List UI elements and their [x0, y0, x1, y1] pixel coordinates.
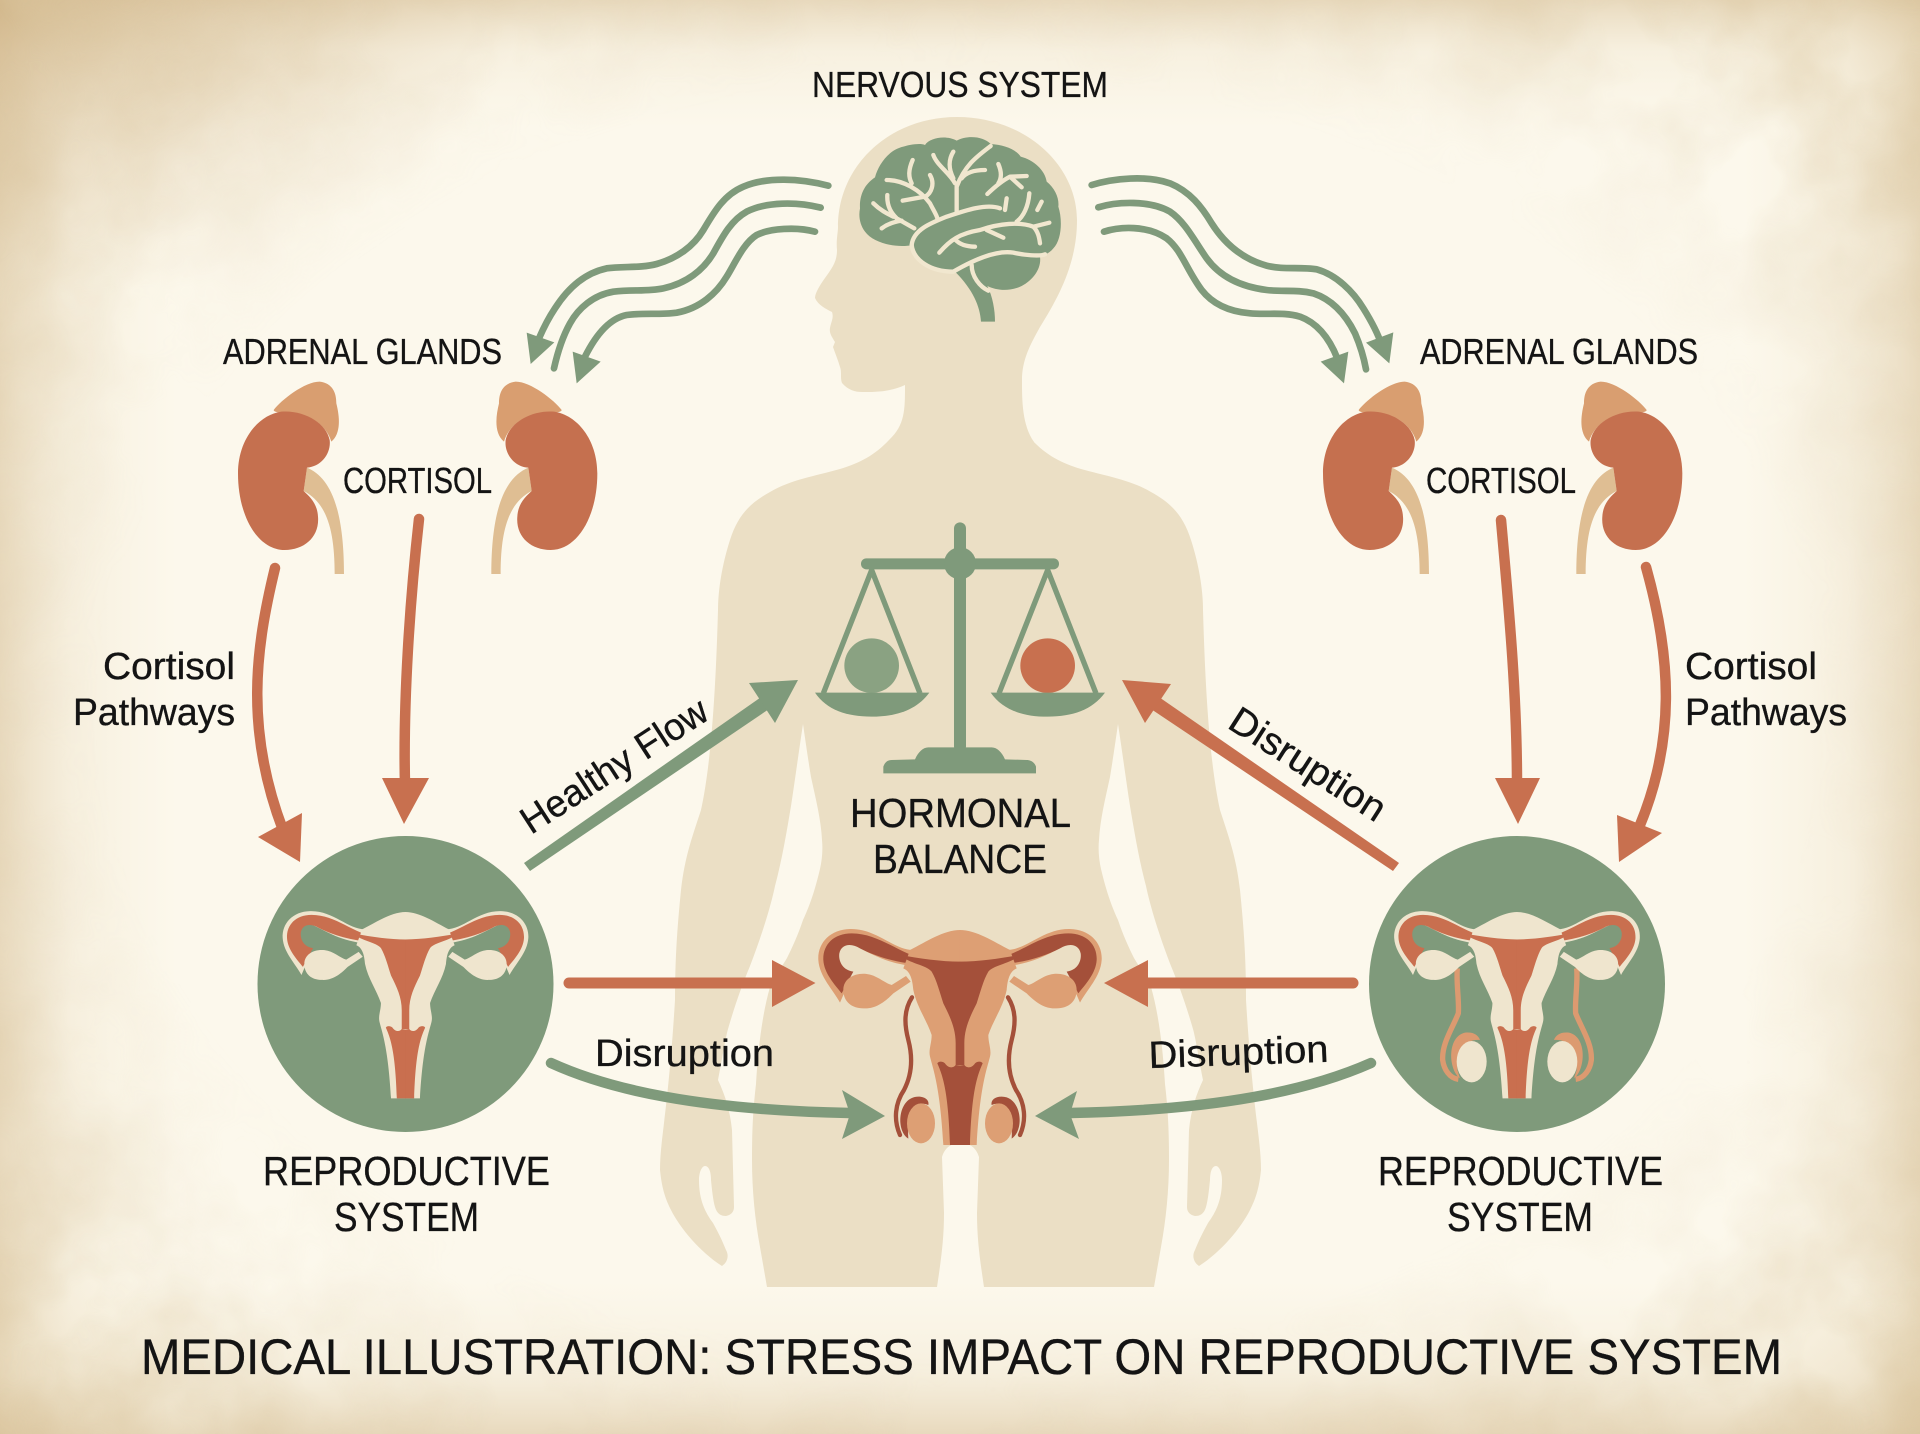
label: adrenal glands right: ADRENAL GLANDS — [1420, 331, 1698, 372]
label: disruption left: Disruption — [595, 1033, 774, 1075]
label: cortisol pathways left: Pathways — [73, 692, 235, 734]
arrow: green curve right — [1035, 1063, 1371, 1139]
label: reproductive system right: REPRODUCTIVE — [1378, 1148, 1663, 1194]
arrow: cortisol inner left — [382, 519, 429, 824]
icon: uterus in right circle — [1394, 911, 1640, 1098]
label: disruption diagonal: Disruption — [1221, 699, 1394, 830]
arrow: disruption diagonal — [1122, 680, 1399, 871]
label: reproductive system left: SYSTEM — [334, 1194, 479, 1240]
arrows: nerve signals left — [527, 180, 828, 383]
label: reproductive system left: REPRODUCTIVE — [263, 1148, 550, 1194]
icon: brain — [859, 137, 1061, 322]
arrows: nerve signals right — [1092, 178, 1393, 383]
icon: central reproductive organs — [818, 929, 1102, 1145]
label: cortisol pathways left: Cortisol — [103, 646, 235, 688]
panel: reproductive circle left — [258, 836, 554, 1132]
body silhouette — [660, 117, 1261, 1287]
label: cortisol pathways right: Cortisol — [1685, 646, 1817, 688]
icon: uterus in left circle — [283, 911, 528, 1098]
label: cortisol pathways right: Pathways — [1685, 692, 1847, 734]
panel: reproductive circle right — [1369, 836, 1665, 1132]
title: MEDICAL ILLUSTRATION: STRESS IMPACT ON REPRODUCTIVE SYSTEM — [141, 1329, 1782, 1385]
arrow: disruption horizontal right — [1104, 960, 1353, 1007]
heading: nervous system: NERVOUS SYSTEM — [812, 64, 1108, 105]
label: cortisol left: CORTISOL — [343, 460, 492, 501]
arrow: cortisol outer left — [257, 568, 302, 862]
arrow: cortisol outer right — [1617, 567, 1666, 862]
label: reproductive system right: SYSTEM — [1447, 1194, 1593, 1240]
label: cortisol right: CORTISOL — [1426, 460, 1576, 501]
label: disruption right: Disruption — [1148, 1029, 1329, 1077]
label: hormonal balance: BALANCE — [873, 836, 1047, 882]
label: healthy flow: Healthy Flow — [513, 690, 717, 843]
icon: testes and ducts in right circle — [1443, 968, 1591, 1082]
arrow: green curve left — [551, 1063, 885, 1139]
label: hormonal balance: HORMONAL — [850, 790, 1071, 836]
arrow: cortisol inner right — [1495, 520, 1540, 824]
icon: kidneys left — [238, 382, 597, 574]
icon: balance scale — [815, 522, 1105, 773]
label: adrenal glands left: ADRENAL GLANDS — [223, 331, 502, 372]
arrow: disruption horizontal left — [569, 960, 816, 1007]
arrow: healthy flow — [524, 680, 798, 871]
icon: kidneys right — [1323, 382, 1682, 574]
